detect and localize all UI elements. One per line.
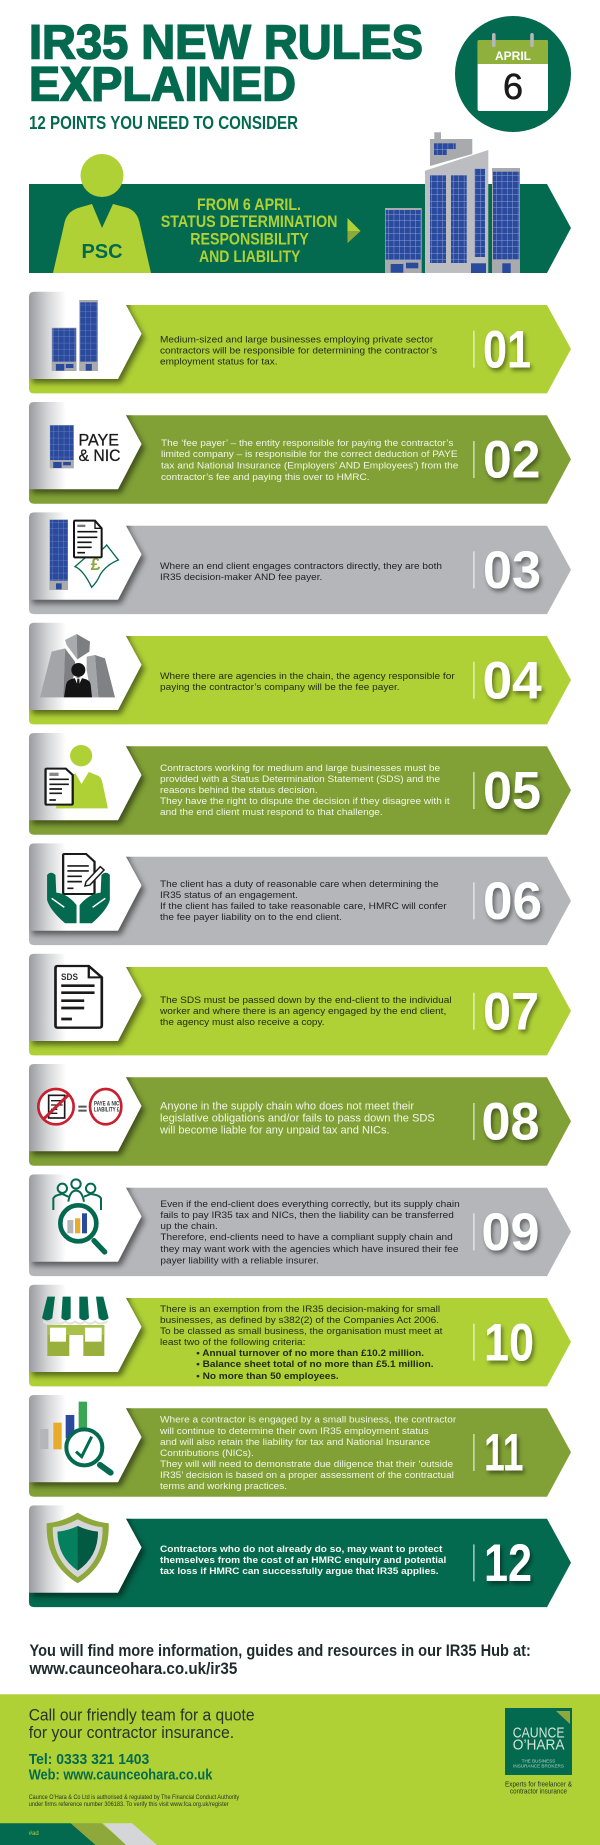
panel: point 03 (29, 512, 571, 614)
title: EXPLAINED (29, 58, 296, 112)
number 11: 11 (484, 1424, 524, 1483)
icon: building with PAYE and NIC: PAYE (78, 431, 119, 450)
arrow card 07 (29, 954, 571, 1055)
icon: building, document and banknote: £ (91, 554, 101, 574)
text 06 (160, 879, 447, 923)
logo: Caunce O'Hara (505, 1708, 572, 1775)
text 10: • Balance sheet total of no more than £5.1 million. (196, 1359, 434, 1370)
title: IR35 NEW RULES (29, 16, 423, 70)
number 02: 02 (483, 431, 540, 490)
icon: people under magnifier with chart (53, 1179, 105, 1252)
logo tagline: contractor insurance (510, 1789, 567, 1796)
text 03: Where an end client engages contractors directly, they are both (160, 561, 442, 572)
text 12: tax loss if HMRC can successfully argue that IR35 applies. (160, 1566, 439, 1577)
panel: hero banner (29, 132, 571, 273)
text 09: Even if the end-client does everything correctly, but its supply chain (160, 1199, 460, 1210)
panel: point 04 (29, 623, 571, 724)
reference code: #ad (29, 1831, 39, 1837)
number 12: 12 (484, 1534, 532, 1593)
text 05 (160, 763, 450, 818)
footer quote text (29, 1707, 255, 1742)
panel: point 05 (29, 733, 571, 835)
icon: PSC person (53, 154, 151, 273)
icon: calendar April 6: 6 (503, 66, 523, 107)
footer contact details (29, 1751, 213, 1783)
text 10: businesses, as defined by s382(2) of the Companies Act 2006. (160, 1315, 439, 1326)
divider 05 (473, 772, 474, 809)
text 02: The ‘fee payer’ – the entity responsible for paying the contractor’s (161, 438, 454, 449)
text 09: Therefore, end-clients need to have a compliant supply chain and (160, 1232, 453, 1243)
text 10: least two of the following criteria: (160, 1337, 305, 1348)
logo: Caunce O'Hara: INSURANCE BROKERS (513, 1764, 564, 1768)
divider 01 (473, 331, 474, 368)
panel: point 08 (29, 1064, 571, 1166)
arrow card 08 (29, 1064, 571, 1166)
hub call to action text (29, 1641, 531, 1678)
hub call to action text: You will find more information, guides and resources in our IR35 Hub at: (30, 1641, 531, 1660)
panel: point 01 (29, 292, 571, 393)
icon: two buildings (52, 300, 98, 371)
icon: shield (47, 1513, 109, 1583)
text 08: Anyone in the supply chain who does not meet their (160, 1101, 415, 1113)
text 11: IR35’ decision is based on a proper assessment of the contractual (160, 1470, 454, 1481)
icon: no document equals liability: LIABILITY £ (94, 1108, 120, 1114)
text 06: If the client has failed to take reasonable care, HMRC will confer (160, 901, 447, 912)
arrow card 06 (29, 843, 571, 945)
number 05: 05 (483, 762, 541, 821)
number 03: 03 (483, 541, 541, 600)
divider 09 (473, 1213, 474, 1250)
icon: person with document (46, 745, 108, 808)
text 10: There is an exemption from the IR35 decision-making for small (160, 1304, 440, 1315)
divider 04 (473, 662, 474, 699)
hero text (161, 196, 338, 266)
text 11 (159, 1414, 457, 1492)
hero arrow band (29, 184, 571, 273)
panel: point 09 (29, 1174, 571, 1276)
text 05: provided with a Status Determination Statement (SDS) and the (160, 774, 440, 785)
text 10: • No more than 50 employees. (196, 1371, 339, 1382)
regulatory small print (29, 1795, 239, 1808)
logo: Caunce O'Hara: CAUNCE (513, 1724, 564, 1741)
logo tagline: Experts for freelancer & (505, 1782, 572, 1789)
hero text: AND LIABILITY (199, 248, 300, 266)
footer quote text: for your contractor insurance. (29, 1724, 234, 1742)
text 09: they may want work with the agencies which have insured their fee (160, 1244, 458, 1255)
text 01 (160, 334, 437, 367)
hub call to action text: www.caunceohara.co.uk/ir35 (29, 1659, 237, 1678)
divider 12 (473, 1544, 474, 1581)
footer background (0, 1694, 600, 1845)
arrow card 12 (29, 1505, 571, 1607)
text 03 (160, 561, 442, 583)
text 11: and will also retain the liability for tax and National Insurance (160, 1437, 430, 1448)
number 10: 10 (484, 1313, 534, 1372)
arrow card 09 (29, 1174, 571, 1276)
number 06: 06 (483, 872, 542, 931)
footer diagonal stripes (0, 1823, 157, 1845)
arrow card 03 (29, 512, 571, 614)
text 11: Where a contractor is engaged by a small business, the contractor (160, 1414, 457, 1425)
hero text: FROM 6 APRIL. (197, 196, 301, 214)
regulatory small print: Caunce O’Hara & Co Ltd is authorised & regulated by The Financial Conduct Authority (29, 1795, 239, 1801)
panel: point 12 (29, 1505, 571, 1607)
number 04: 04 (482, 651, 542, 710)
footer contact details: Tel: 0333 321 1403 (29, 1751, 149, 1768)
text 01: employment status for tax. (160, 356, 278, 367)
divider 08 (473, 1103, 474, 1140)
text 06: IR35 status of an engagement. (160, 890, 298, 901)
footer contact details: Web: www.caunceohara.co.uk (29, 1766, 213, 1783)
logo: Caunce O'Hara: O’HARA (513, 1736, 564, 1753)
number 07: 07 (483, 982, 539, 1041)
arrow card 11 (29, 1395, 571, 1497)
number 08: 08 (482, 1093, 540, 1152)
text 07: the agency must also receive a copy. (160, 1017, 325, 1028)
icon: no document equals liability (38, 1089, 121, 1124)
text 11: They will will need to demonstrate due diligence that their ‘outside (160, 1459, 453, 1470)
text 05: and the end client must respond to that challenge. (160, 807, 383, 818)
text 08: will become liable for any unpaid tax and NICs. (159, 1125, 390, 1137)
icon: SDS document: SDS (61, 972, 78, 982)
divider 02 (473, 441, 474, 478)
text 12 (160, 1544, 446, 1577)
text 01: Medium-sized and large businesses employing private sector (160, 334, 434, 345)
text 12: themselves from the cost of an HMRC enquiry and potential (160, 1555, 446, 1566)
number 09: 09 (482, 1203, 540, 1262)
arrow card 02 (29, 402, 571, 504)
logo tagline (505, 1782, 572, 1796)
text 10 (160, 1304, 443, 1382)
text 03: IR35 decision-maker AND fee payer. (160, 572, 322, 583)
text 09: payer liability with a reliable insurer. (160, 1255, 319, 1266)
text 10: To be classed as small business, the organisation must meet at (160, 1326, 443, 1337)
icon: hands holding document (47, 854, 110, 923)
icon: calendar April 6 (455, 16, 571, 132)
icon: calendar April 6: APRIL (495, 49, 531, 63)
text 02: contractor’s fee and paying this over to HMRC. (161, 472, 370, 483)
text 10: • Annual turnover of no more than £10.2 million. (196, 1348, 424, 1359)
icon: no document equals liability: PAYE & NIC (94, 1102, 120, 1108)
divider 11 (473, 1434, 474, 1471)
text 11: will continue to determine their own IR35 employment status (159, 1426, 429, 1437)
text 11: Contributions (NICs). (160, 1448, 254, 1459)
text 04: paying the contractor’s company will be the fee payer. (160, 682, 400, 693)
text 09: up the chain. (160, 1221, 218, 1232)
text 07 (159, 995, 452, 1028)
text 02 (161, 438, 458, 483)
arrow card 01 (29, 292, 571, 393)
icon: PSC person: PSC (81, 241, 123, 263)
icon: building, document and banknote (49, 519, 118, 590)
divider 07 (473, 993, 474, 1030)
panel: point 10 (29, 1285, 571, 1386)
panel: point 11 (29, 1395, 571, 1497)
arrow card 10 (29, 1285, 571, 1386)
icon: shop front (42, 1297, 109, 1356)
footer quote text: Call our friendly team for a quote (29, 1707, 255, 1725)
text 11: terms and working practices. (160, 1481, 287, 1492)
panel: point 07 (29, 954, 571, 1055)
regulatory small print: under firms reference number 306183. To verify this visit www.fca.org.uk/register (29, 1802, 229, 1808)
text 02: tax and National Insurance (Employers’ AND Employees’) from the (161, 460, 458, 471)
arrow card 05 (29, 733, 571, 835)
text 04: Where there are agencies in the chain, the agency responsible for (160, 671, 456, 682)
text 06: The client has a duty of reasonable care when determining the (160, 879, 439, 890)
divider 03 (473, 551, 474, 588)
text 09 (160, 1199, 460, 1266)
text 12: Contractors who do not already do so, may want to protect (160, 1544, 443, 1555)
text 06: the fee payer liability on to the end client. (160, 912, 342, 923)
text 09: fails to pay IR35 tax and NICs, then the liability can be transferred (160, 1210, 454, 1221)
icon: SDS document (55, 966, 102, 1028)
icon: office buildings (385, 132, 520, 273)
number 01: 01 (483, 320, 531, 379)
text 05: They have the right to dispute the decision if they disagree with it (160, 796, 450, 807)
panel: point 02 (29, 402, 571, 504)
subtitle: 12 POINTS YOU NEED TO CONSIDER (29, 113, 298, 133)
hero small arrow (348, 218, 360, 243)
logo: Caunce O'Hara: THE BUSINESS (522, 1758, 555, 1764)
divider 06 (473, 882, 474, 919)
icon: bars and magnifier with check (40, 1402, 111, 1473)
hero text: RESPONSIBILITY (190, 230, 309, 248)
arrow card 04 (29, 623, 571, 724)
text 08: legislative obligations and/or fails to pass down the SDS (160, 1113, 435, 1125)
title (29, 16, 423, 112)
text 04 (160, 671, 456, 693)
icon: businessman and buildings (40, 634, 115, 697)
hero text: STATUS DETERMINATION (161, 213, 338, 231)
icon: building with PAYE and NIC: & NIC (78, 446, 120, 465)
text 05: reasons behind the status decision. (160, 785, 318, 796)
text 05: Contractors working for medium and large businesses must be (160, 763, 440, 774)
panel: point 06 (29, 843, 571, 945)
text 08 (159, 1101, 435, 1137)
icon: building with PAYE and NIC (50, 425, 120, 468)
text 02: limited company – is responsible for the correct deduction of PAYE (161, 449, 458, 460)
divider 10 (473, 1324, 474, 1361)
panel: footer (0, 1694, 600, 1845)
text 07: The SDS must be passed down by the end-client to the individual (160, 995, 452, 1006)
text 07: worker and where there is an agency engaged by the end client, (159, 1006, 446, 1017)
text 01: contractors will be responsible for determining the contractor’s (160, 345, 437, 356)
